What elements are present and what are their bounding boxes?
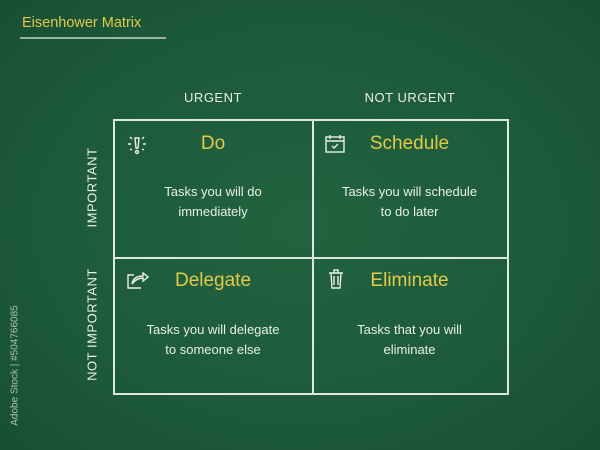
column label: urgent: URGENT <box>184 90 242 105</box>
heading: Delegate <box>175 270 251 291</box>
description <box>164 184 262 219</box>
description: immediately <box>178 204 248 219</box>
description: Tasks you will delegate <box>147 322 279 337</box>
icon: lightbulb <box>128 136 146 154</box>
heading: Eliminate <box>370 270 449 291</box>
panel: delegate <box>127 270 279 357</box>
heading: Do <box>201 133 225 154</box>
icon: trash <box>329 269 343 289</box>
panel: do <box>128 133 262 219</box>
description: Tasks you will schedule <box>342 184 477 199</box>
side watermark text: Adobe Stock | #504766085 <box>10 305 20 426</box>
description: to do later <box>381 204 438 219</box>
row label: important: IMPORTANT <box>84 148 100 227</box>
row label: not important: NOT IMPORTANT <box>84 268 100 381</box>
icon: share <box>127 272 149 289</box>
description: Tasks you will do <box>164 184 262 199</box>
matrix grid <box>113 119 509 395</box>
description <box>357 322 462 357</box>
icon: calendar <box>325 135 345 153</box>
heading: Schedule <box>370 133 449 154</box>
column label: not urgent: NOT URGENT <box>365 90 455 105</box>
panel: eliminate <box>329 269 462 357</box>
description: Tasks that you will <box>357 322 462 337</box>
description: eliminate <box>383 342 436 357</box>
description: to someone else <box>165 342 261 357</box>
title: Eisenhower Matrix <box>22 15 141 31</box>
description <box>342 184 477 219</box>
description <box>146 322 279 357</box>
panel: schedule <box>325 133 477 219</box>
